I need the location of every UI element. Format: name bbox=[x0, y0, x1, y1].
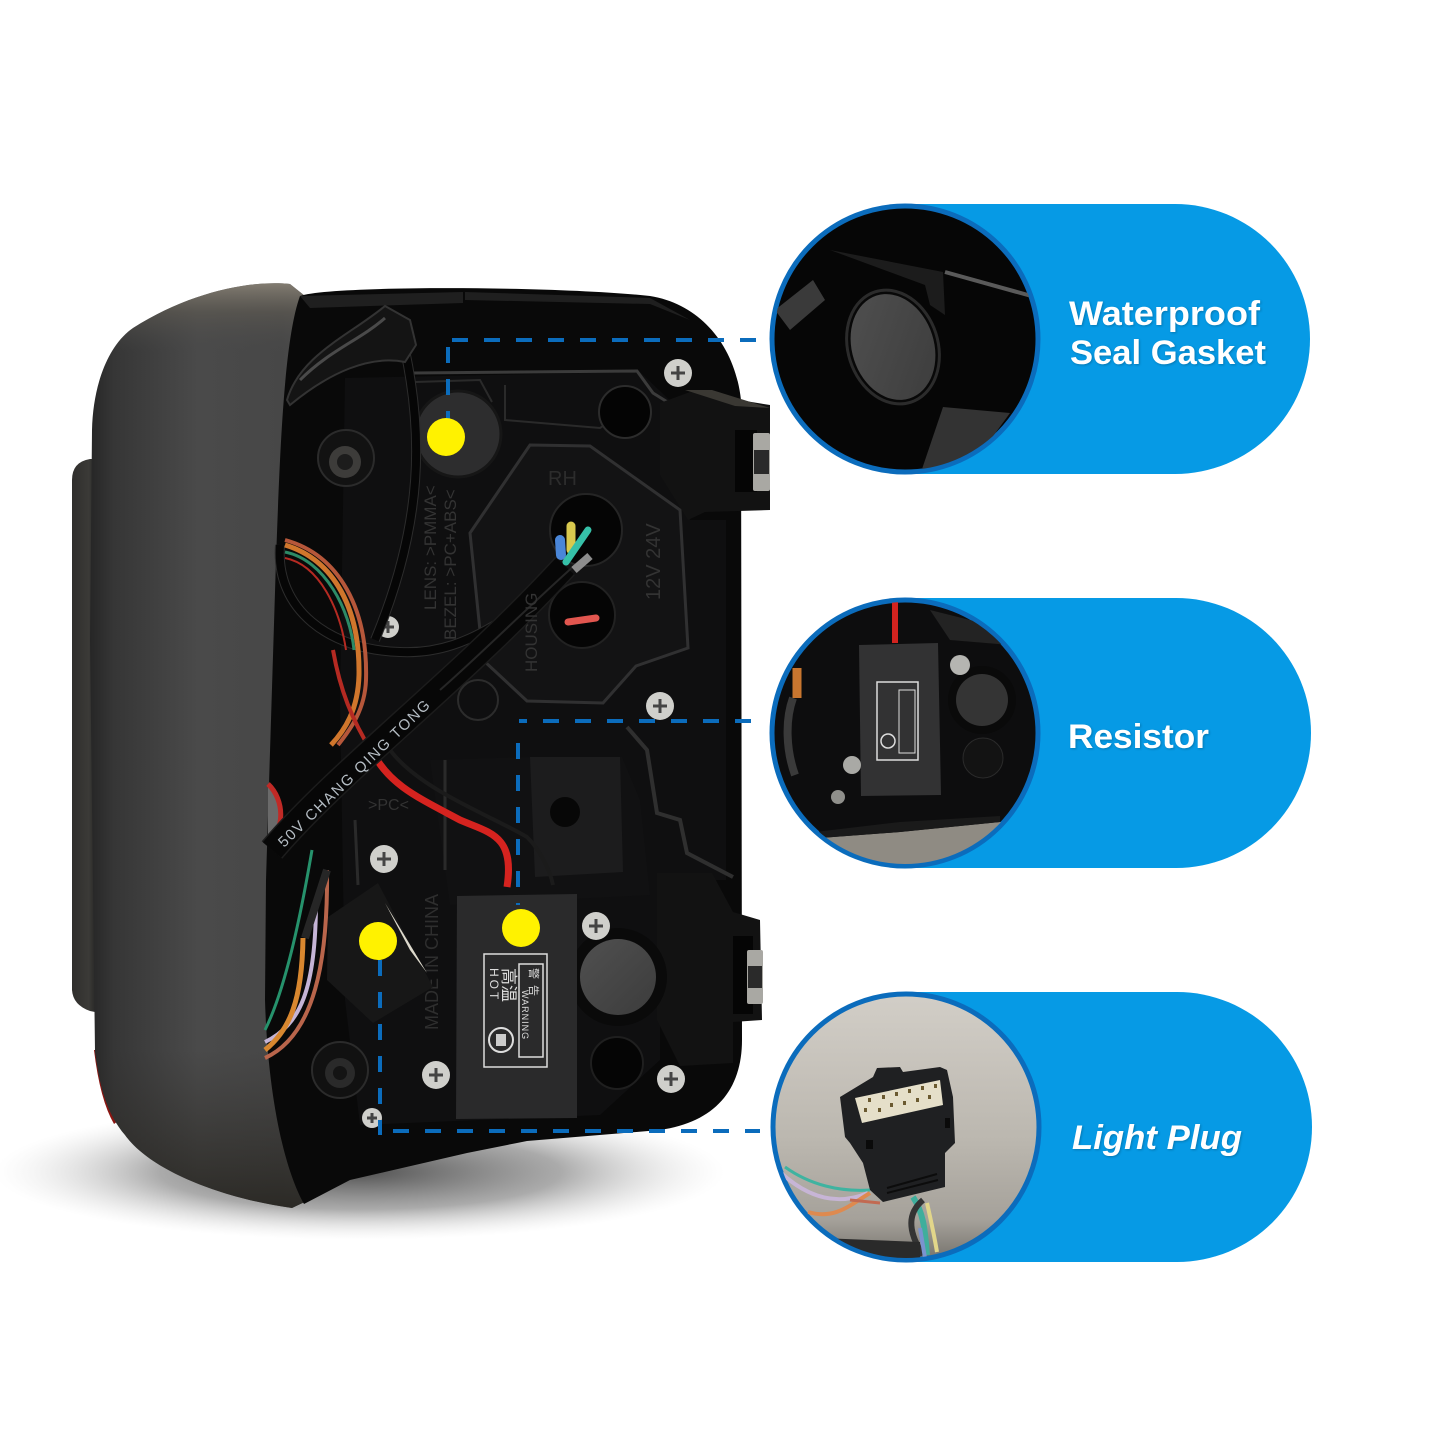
lower left wires bbox=[265, 870, 327, 1058]
taped wire bundle bbox=[287, 306, 416, 405]
wire grommet lower bbox=[549, 582, 615, 648]
tail light product photo: BEZEL: >PC+ABS< bbox=[441, 489, 460, 640]
main sheathed cable bbox=[272, 566, 565, 850]
screw crosses bbox=[367, 366, 685, 1123]
product shadow bbox=[0, 1104, 725, 1240]
panel label: Resistor bbox=[1068, 718, 1209, 756]
small bracket bbox=[327, 883, 433, 1023]
inset photo: resistor bbox=[770, 600, 1040, 870]
panel: resistor bbox=[770, 598, 1311, 870]
lower left ridge bbox=[355, 760, 445, 885]
rear back shell bbox=[72, 459, 100, 1013]
outer housing bbox=[90, 283, 330, 1208]
tail light product photo: RH bbox=[548, 468, 577, 490]
housing bottom shade bbox=[112, 1094, 304, 1208]
tail light product photo: HOUSING bbox=[522, 593, 541, 672]
red ring at edge bbox=[268, 784, 281, 843]
marker: resistor dot bbox=[502, 909, 540, 947]
black cable upper loop bbox=[280, 350, 495, 652]
lower gasket bbox=[569, 928, 667, 1026]
marker: gasket dot bbox=[427, 418, 465, 456]
square block bbox=[530, 757, 623, 877]
resistor warning label bbox=[484, 954, 547, 1067]
tail light product photo: LENS: >PMMA< bbox=[421, 485, 440, 610]
inner tray bbox=[340, 372, 726, 1125]
marker: plug dot bbox=[359, 922, 397, 960]
lower left hex bolt bbox=[312, 1042, 368, 1098]
inset photo: plug bbox=[773, 994, 1039, 1262]
embossed labels: 12V 24V bbox=[643, 523, 665, 600]
tail light product photo: >PC< bbox=[368, 797, 409, 814]
pill background bbox=[772, 992, 1312, 1262]
panel label: Waterproof bbox=[1069, 295, 1261, 333]
upper recess bbox=[599, 386, 651, 438]
panel label: Light Plug bbox=[1072, 1119, 1242, 1157]
resistor warning label: 警告 bbox=[527, 968, 541, 1002]
housing top highlight bbox=[124, 283, 304, 336]
panel: waterproof seal gasket: Seal Gasket bbox=[1070, 334, 1266, 372]
upper right clip bbox=[660, 392, 770, 520]
inset warning label bbox=[877, 682, 918, 760]
red lens edge bbox=[94, 1050, 122, 1124]
octagon control cover bbox=[470, 445, 688, 703]
plug pins bbox=[864, 1086, 937, 1110]
resistor warning label: HOT bbox=[487, 968, 501, 1002]
pill background bbox=[770, 204, 1310, 474]
colored wire tips bbox=[560, 540, 561, 555]
resistor warning label: 高温 bbox=[499, 968, 518, 1002]
upper ridge bbox=[413, 371, 677, 408]
lower right clip bbox=[657, 873, 762, 1066]
lower raised tray bbox=[430, 757, 650, 905]
interior black cavity bbox=[265, 288, 742, 1204]
upper left hex bolt bbox=[318, 430, 374, 486]
panel: waterproof seal gasket bbox=[770, 204, 1310, 475]
screws bbox=[362, 359, 692, 1128]
upper gasket bbox=[415, 391, 501, 477]
inset photo: gasket bbox=[772, 206, 1038, 475]
date stamp bbox=[458, 680, 498, 720]
resistor warning label: WARNING bbox=[520, 990, 530, 1040]
red power wire bbox=[373, 753, 509, 887]
connector line: resistor bbox=[518, 721, 760, 905]
tail light product photo: MADE IN CHINA bbox=[422, 894, 442, 1030]
tail light product photo bbox=[72, 280, 770, 1210]
pill background bbox=[771, 598, 1311, 868]
lower ridge bbox=[627, 727, 733, 877]
panel: light plug bbox=[772, 992, 1312, 1262]
black braided wire bbox=[390, 750, 553, 885]
wire grommet upper bbox=[550, 494, 622, 566]
lower recess bbox=[591, 1037, 643, 1089]
colored wires left bbox=[285, 540, 366, 745]
connector line: light plug bbox=[380, 960, 760, 1135]
cable print: 50V CHANG QING TONG bbox=[275, 696, 434, 851]
resistor bbox=[456, 894, 577, 1119]
top rim notch bbox=[300, 292, 690, 320]
connector line: waterproof seal gasket bbox=[448, 340, 768, 420]
ridge around gasket bbox=[415, 380, 640, 428]
